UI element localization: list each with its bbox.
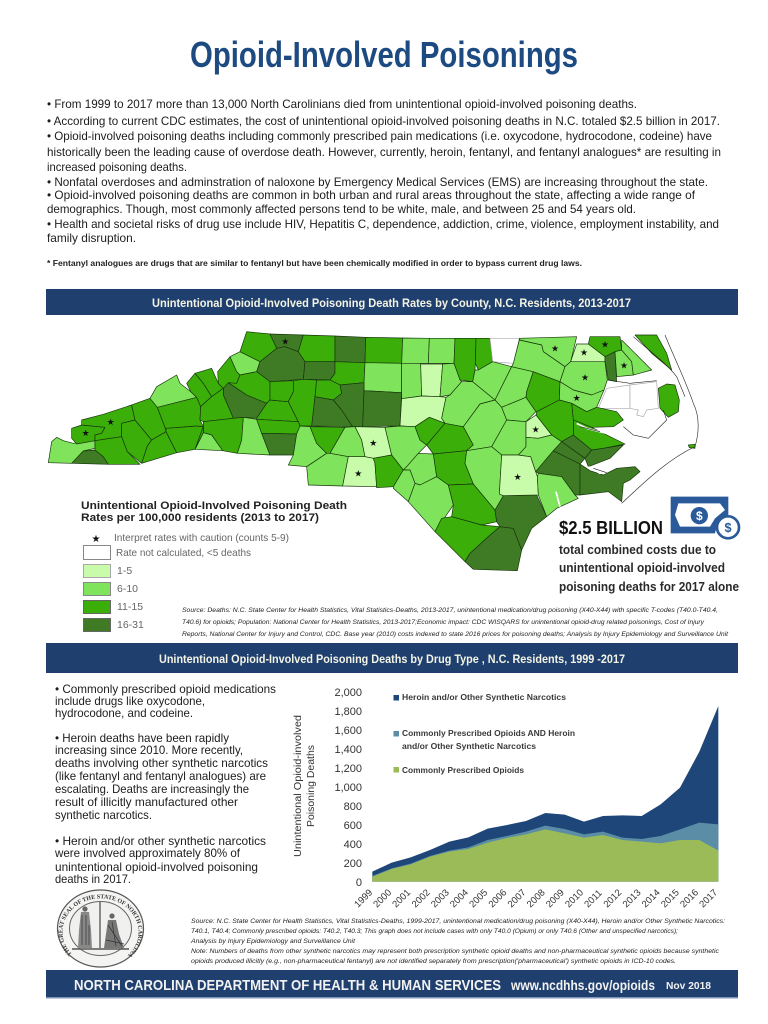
legend rows: Interpret rates with caution (counts 5-9) [114,532,289,544]
y axis labels: 2,000 [334,687,362,699]
map: caution stars: ★ [82,429,90,439]
map: caution stars: ★ [573,394,581,404]
x axis labels: 2007 [506,887,528,910]
y axis labels: 800 [344,801,362,813]
y axis labels: 0 [356,877,362,889]
source note: chart: T40.1, T40.4; Commonly prescribed opioids: T40.2, T40.3; This graph does not include cases with only T40.0 (Opium) or only T40.6 (Other and unspecified narcotics); [191,928,678,935]
text block: drug type notes: hydrocodone, and codeine. [55,706,193,720]
text block: key facts bullets: • According to current CDC estimates, the cost of unintentional opioid-involved poisoning deaths in N.C. totaled $2.5 billion in 2017. [47,114,720,128]
map: caution stars: ★ [107,418,115,428]
text block: drug type notes: • Commonly prescribed opioid medications [55,682,276,696]
text block: key facts bullets: • Health and societal risks of drug use include HIV, Hepatitis C, dependence, addiction, crime, violence, employment instability, and [47,217,719,231]
legend rows: 1-5 [117,565,132,577]
chart legend: Commonly Prescribed Opioids [402,765,524,775]
text block: drug type notes: synthetic narcotics. [55,808,152,822]
text block: drug type notes: deaths involving other synthetic narcotics [55,756,268,770]
text block: key facts bullets: • Opioid-involved poisoning deaths are common in both urban and rural areas throughout the state, affecting a wide range of [47,188,696,202]
y axis title: Poisoning Deaths [306,745,317,827]
text block: key facts bullets [47,97,721,245]
chart legend [394,692,575,775]
x axis labels: 2014 [640,887,663,910]
source note: chart: Analysis by Injury Epidemiology and Surveillance Unit [190,938,356,945]
text block: drug type notes: unintentional opioid-involved poisoning [55,860,258,874]
x axis labels: 2012 [602,887,624,910]
y axis labels [334,687,362,889]
y axis title: Unintentional Opioid-involved [293,715,304,857]
map legend [81,500,347,632]
x axis labels: 2008 [525,887,548,910]
x axis labels: 2010 [563,887,586,910]
text block: key facts bullets: demographics. Though, most commonly affected persons tend to be white, male, and between 25 and 54 years old. [47,202,636,216]
chart legend: Commonly Prescribed Opioids AND Heroin [402,728,575,738]
legend rows: Rate not calculated, <5 deaths [116,547,251,559]
x axis labels: 2013 [621,887,643,910]
y axis title [293,715,317,857]
source note: map [182,607,729,638]
callout figure: $2.5 BILLION [559,518,663,538]
source note: chart: Source: N.C. State Center for Health Statistics, Vital Statistics-Deaths, 1999-2017, unintentional medication/drug poisoning (X40-X44), Heroin and/or Other Synthetic Narcotics: [191,918,725,925]
map: caution stars: ★ [532,425,540,435]
footnote: fentanyl analogues: * Fentanyl analogues are drugs that are similar to fentanyl but have been chemically modified in order to bypass current drug laws. [47,258,582,268]
text block: drug type notes: escalating. Deaths are increasingly the [55,782,249,796]
text block: key facts bullets: • Nonfatal overdoses and adminstration of naloxone by Emergency Medical Services (EMS) are increasing throughout the state. [47,175,708,189]
legend rows: 11-15 [117,601,143,613]
chart areas [372,706,718,882]
source note: map: T40.6) for opioids; Population: National Center for Health Statistics, 2013-2017;Economic impact: CDC WISQARS for unintentional opioid-drug related poisonings, Cost of Injury [182,619,705,626]
y axis labels: 200 [344,858,362,870]
map: caution stars [82,337,628,483]
x axis labels: 2003 [429,887,452,910]
x axis labels [352,887,720,910]
source note: chart: Note: Numbers of deaths from other synthetic narcotics may represent both prescription synthetic opioid deaths and non-pharmaceutical synthetic opioids because synthetic [191,948,720,955]
chart legend: Heroin and/or Other Synthetic Narcotics [402,692,566,702]
y axis labels: 1,400 [334,744,362,756]
x axis labels: 2016 [678,887,701,910]
icon: money [671,497,739,538]
map: caution stars: ★ [580,349,588,359]
x axis labels: 2017 [697,887,720,910]
section header: chart [46,643,738,673]
source note: chart: opioids produced illicitly (e.g., non-pharmaceutical fentanyl) are not identified separately from prescription('pharmaceutical') synthetic opioids in ICD-10 codes. [191,958,676,965]
map: caution stars: ★ [581,374,589,384]
callout text [559,543,739,594]
text block: drug type notes: increasing since 2010. More recently, [55,743,243,757]
y axis labels: 400 [344,839,362,851]
section header: map [46,289,738,315]
map: caution stars: ★ [514,473,522,483]
x axis labels: 2011 [582,888,605,910]
map: caution stars: ★ [620,361,628,371]
icon: money: $ [724,521,732,535]
map: caution stars: ★ [354,470,362,480]
legend rows: 6-10 [117,583,138,595]
map: caution stars: ★ [369,439,377,449]
text block: drug type notes: (like fentanyl and fentanyl analogues) are [55,769,266,783]
text block: key facts bullets: increased poisoning deaths. [47,160,187,174]
map: caution stars: ★ [281,337,289,347]
legend rows [84,532,289,632]
section header: map: Unintentional Opioid-Involved Poisoning Death Rates by County, N.C. Residents, 2013-2017 [152,298,631,310]
map: North Carolina counties [48,332,698,571]
callout text: poisoning deaths for 2017 alone [559,580,739,594]
legend title [81,500,347,524]
text block: key facts bullets: historically been the leading cause of overdose death. However, currently, heroin, fentanyl, and fentanyl analogues* are resulting in [47,145,721,159]
text block: drug type notes: deaths in 2017. [55,872,131,886]
icon: money: $ [696,509,703,523]
map: caution stars: ★ [551,345,559,355]
x axis labels: 2006 [487,887,509,910]
callout text: unintentional opioid-involved [559,561,725,575]
source note: map: Reports, National Center for Injury and Control, CDC. Base year (2010) costs indexed to state 2016 prices for poisoning deaths; Analysis by Injury Epidemiology and Surveillance Unit [182,631,729,638]
map: western counties [48,332,403,488]
text block: key facts bullets: • Opioid-involved poisoning deaths including commonly prescribed pain medications (i.e. oxycodone, hydrocodone, codeine) have [47,129,712,143]
text block: drug type notes: • Heroin deaths have been rapidly [55,731,229,745]
text block: drug type notes: • Heroin and/or other synthetic narcotics [55,834,266,848]
x axis labels: 2000 [371,887,394,910]
icon: state seal: THE GREAT SEAL OF THE STATE OF NORTH CAROLINA [58,894,142,957]
y axis labels: 1,600 [334,725,362,737]
text block: drug type notes: were involved approximately 80% of [54,846,241,860]
y axis labels: 1,200 [334,763,362,775]
legend title: Rates per 100,000 residents (2013 to 2017) [81,512,319,524]
x axis labels: 1999 [352,887,375,910]
text block: key facts bullets: • From 1999 to 2017 more than 13,000 North Carolinians died from unintentional opioid-involved poisoning deaths. [47,97,637,111]
y axis labels: 1,800 [334,706,362,718]
x axis labels: 2002 [410,887,433,910]
callout text: total combined costs due to [559,543,716,557]
y axis labels: 1,000 [334,782,362,794]
callout: $2.5 billion [559,497,739,594]
y axis labels: 600 [344,820,362,832]
title: Opioid-Involved Poisonings [190,34,578,75]
source note: chart [190,918,725,965]
text block: drug type notes [54,682,276,886]
x axis labels: 2005 [467,887,490,910]
x axis labels: 2015 [659,887,682,910]
area chart: deaths by drug type [293,687,720,910]
legend rows: 16-31 [117,619,144,631]
legend title: Unintentional Opioid-Involved Poisoning Death [81,500,347,512]
text block: key facts bullets: family disruption. [47,231,136,245]
footer bar: NORTH CAROLINA DEPARTMENT OF HEALTH & HUMAN SERVICES [74,977,501,994]
legend rows: ★ [92,534,101,545]
text block: drug type notes: result of illicitly manufactured other [55,795,238,809]
chart legend: and/or Other Synthetic Narcotics [402,741,536,751]
x axis labels: 2001 [390,887,413,910]
footer bar: www.ncdhhs.gov/opioids [510,978,655,993]
footer bar: Nov 2018 [666,980,711,992]
x axis labels: 2009 [544,887,567,910]
section header: chart: Unintentional Opioid-Involved Poisoning Deaths by Drug Type , N.C. Residents, 1999 -2017 [159,654,625,666]
footer bar [46,970,738,998]
map: caution stars: ★ [601,340,609,350]
source note: map: Source: Deaths: N.C. State Center for Health Statistics, Vital Statistics-Deaths, 2013-2017, unintentional medication/drug poisoning (X40-X44) with specific T-codes (T40.0-T40.4, [182,607,718,614]
x axis labels: 2004 [448,887,471,910]
text block: drug type notes: include drugs like oxycodone, [55,694,205,708]
map: eastern counties [385,335,698,571]
